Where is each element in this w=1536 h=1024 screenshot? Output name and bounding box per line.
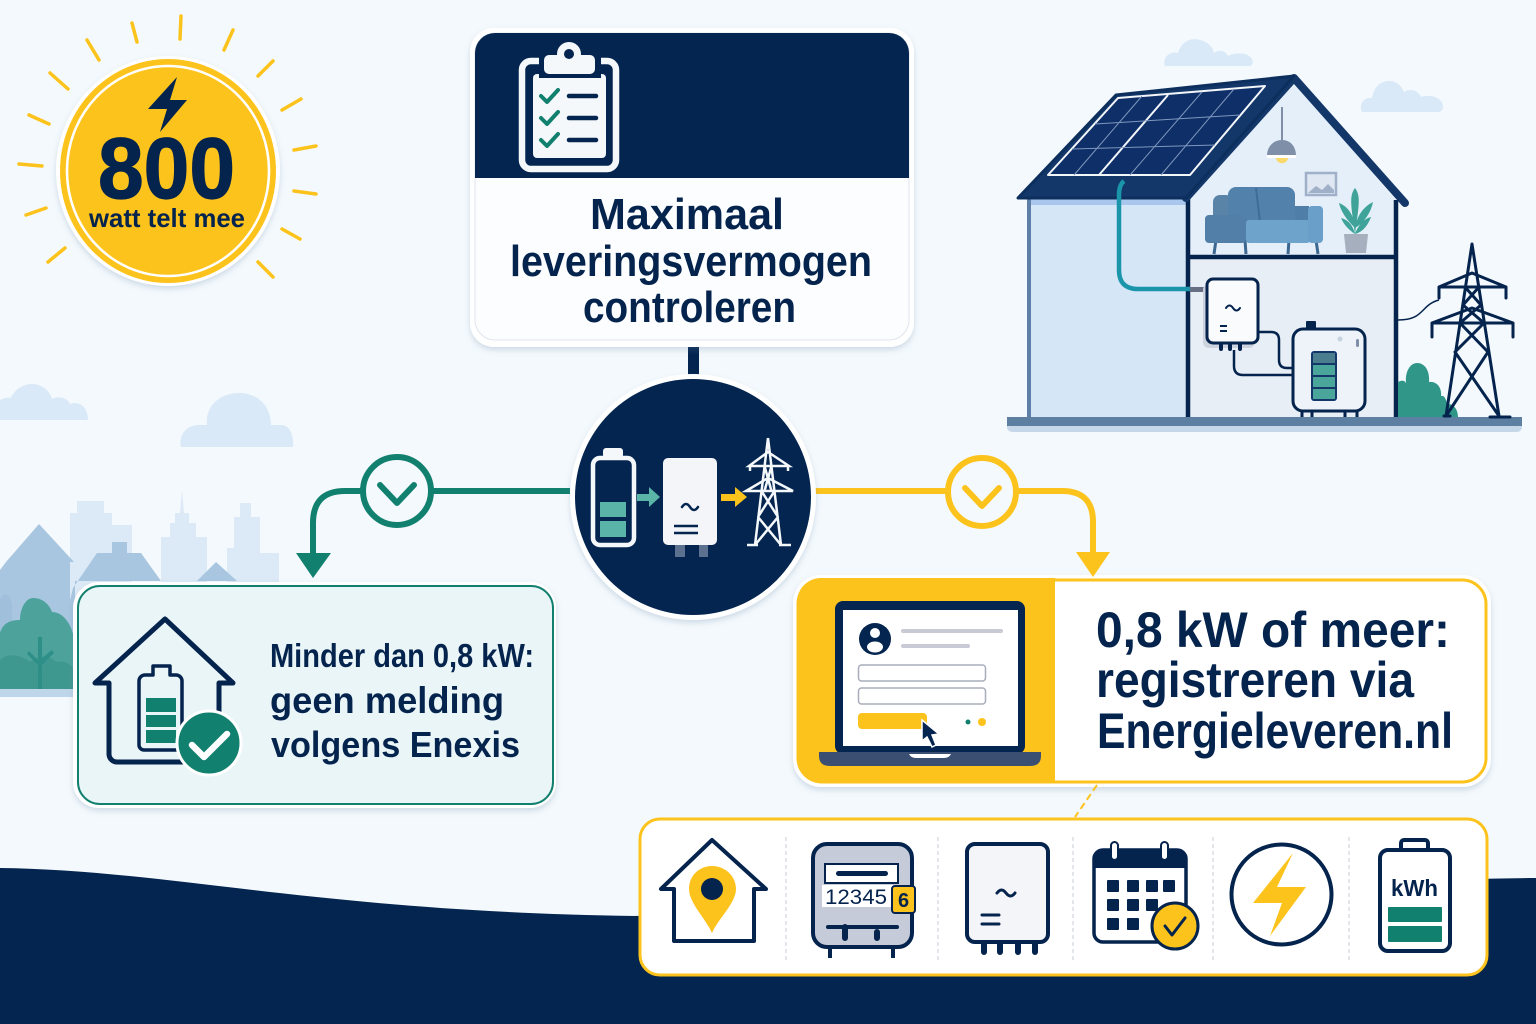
heading text: Maximaal — [590, 190, 784, 239]
icon: inverter — [967, 844, 1048, 952]
heading text: controleren — [583, 283, 796, 332]
icon: lightning in circle — [1232, 844, 1332, 944]
inverter — [1203, 279, 1258, 349]
background: city skyline — [0, 490, 279, 690]
roof gable — [1186, 78, 1405, 203]
plant — [1339, 188, 1373, 253]
solar cable — [1119, 181, 1190, 289]
walls and floor — [1188, 198, 1396, 417]
roof with solar panels — [1018, 76, 1294, 198]
arrow: battery to inverter — [637, 487, 660, 507]
arrow: inverter to grid — [721, 487, 747, 507]
meter badge digit: 6 — [898, 890, 909, 912]
text: no notification: volgens Enexis — [271, 724, 520, 765]
caption watt telt mee: watt telt mee — [88, 203, 245, 233]
icon: laptop with registration form — [819, 601, 1041, 766]
text: no notification — [270, 637, 534, 765]
background: clouds — [0, 39, 1443, 447]
panel: Maximaal leveringsvermogen controleren — [470, 28, 914, 347]
panel: Minder dan 0,8 kW geen melding — [73, 582, 556, 808]
grid wire — [1398, 300, 1439, 320]
icon: house with location pin — [661, 840, 766, 941]
battery cables — [1234, 332, 1293, 375]
arrow: teal branch to left card — [296, 457, 570, 578]
number 800: 800 — [98, 121, 235, 217]
text: register: Energieleveren.nl — [1097, 703, 1453, 759]
illustration: house with solar panels, inverter, battery and pylon — [1007, 76, 1522, 432]
icon: clipboard checklist — [522, 42, 616, 169]
dashed connector to checklist strip — [1075, 785, 1097, 817]
picture frame — [1306, 173, 1336, 195]
hub: battery, inverter and grid circle — [570, 374, 816, 620]
tree — [1398, 363, 1458, 417]
sofa — [1205, 187, 1323, 254]
panel: required details icon strip — [640, 819, 1487, 975]
text: no notification: Minder dan 0,8 kW: — [270, 637, 534, 674]
background: trees — [0, 598, 75, 697]
sun badge: 800 watt telt mee — [19, 16, 316, 286]
home battery — [1293, 321, 1365, 417]
upper room — [1188, 82, 1396, 257]
icon: calendar with check — [1094, 842, 1198, 949]
lower room — [1188, 257, 1396, 417]
icon: inverter — [663, 458, 717, 557]
lamp — [1267, 107, 1296, 163]
icon: pylon — [746, 438, 793, 545]
arrow: yellow branch to right card — [815, 458, 1110, 577]
icon: kWh battery — [1380, 840, 1450, 951]
connector: top card to hub — [688, 345, 699, 380]
pylon — [1432, 244, 1513, 417]
heading text — [510, 190, 872, 332]
text: register: registreren via — [1096, 652, 1415, 708]
icon: electricity meter — [813, 844, 915, 958]
text: register — [1096, 602, 1453, 759]
ground strip — [1007, 417, 1522, 432]
icon: lightning bolt — [148, 77, 187, 132]
text: no notification: geen melding — [270, 680, 504, 721]
icon: battery — [593, 448, 634, 545]
text: register: 0,8 kW of meer: — [1096, 602, 1450, 658]
sun rays — [19, 16, 316, 277]
bottom wave — [0, 868, 1536, 1024]
kWh label: kWh — [1391, 875, 1438, 901]
panel: 0,8 kW of meer registreren — [793, 575, 1491, 787]
heading text: leveringsvermogen — [510, 237, 872, 286]
house left wall — [1029, 198, 1188, 417]
icon: house with battery and check — [95, 619, 241, 775]
meter digits: 12345 — [825, 886, 887, 909]
